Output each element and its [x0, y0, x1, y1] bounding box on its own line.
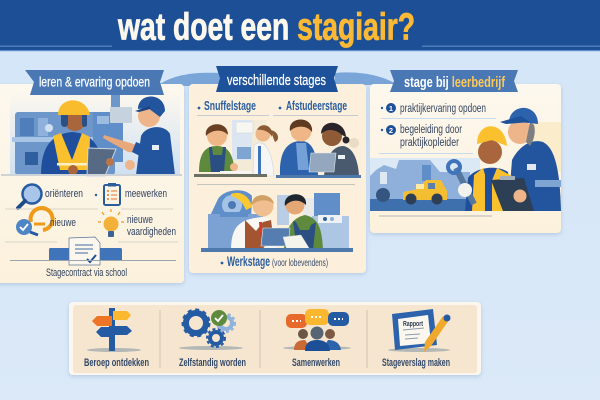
heading: snuffelstage: Snuffelstage [204, 98, 256, 113]
panel: bottom benefits strip [69, 302, 481, 375]
item: samenwerken: Samenwerken [292, 357, 340, 369]
scene: two workers at a machine [1, 92, 182, 176]
clipboard [491, 176, 534, 211]
apprentice with helmet and wrench [448, 126, 514, 211]
item: zelfstandig worden [179, 310, 246, 369]
item: samenwerken [283, 309, 351, 369]
item: beroep ontdekken [84, 308, 149, 369]
ribbon: stage bij leerbedrijf: stage bij leerbedrijf [404, 75, 505, 91]
item: begeleiding door praktijkopleider [381, 124, 462, 149]
item: praktijkervaring opdoen: 1 [389, 104, 393, 113]
title: wat doet een stagiair? [117, 6, 415, 48]
icon: stagecontract document [49, 237, 122, 265]
item: praktijkervaring opdoen: praktijkervaring opdoen [400, 103, 486, 115]
item: begeleiding door praktijkopleider: 2 [389, 126, 393, 135]
heading: afstudeerstage [279, 98, 347, 113]
panel: leren en ervaring opdoen [0, 84, 184, 283]
label: werkstage: (voor lobevendens) [272, 258, 328, 269]
item: stageverslag maken: Rapport [403, 321, 423, 328]
item: praktijkervaring opdoen [381, 103, 486, 115]
item: meewerken: meewerken [125, 188, 167, 200]
item: orienteren [18, 184, 83, 208]
item: nieuwe: nieuwe [50, 217, 76, 229]
panel: verschillende stages [189, 84, 366, 273]
item: begeleiding door praktijkopleider: begeleiding door [400, 124, 462, 136]
worker with blue cap pointing [103, 96, 175, 175]
label: stagecontract via school: Stagecontract via school [46, 267, 127, 279]
label: werkstage [221, 253, 328, 269]
scene: snuffelstage [194, 120, 278, 177]
item: nieuwe vaardigheden [98, 209, 176, 238]
item: nieuwe vaardigheden: vaardigheden [127, 226, 176, 238]
car [403, 180, 447, 204]
ribbon: leren en ervaring opdoen: leren & ervaring opdoen [39, 74, 150, 90]
panel: stage bij leerbedrijf [370, 84, 561, 233]
item: orienteren: oriënteren [45, 188, 83, 200]
item: begeleiding door praktijkopleider: praktijkopleider [400, 137, 459, 149]
item: stageverslag maken [382, 309, 450, 369]
scene: afstudeerstage [276, 120, 361, 178]
heading: snuffelstage [198, 98, 256, 113]
worker with helmet and vest [41, 100, 116, 176]
ribbon: verschillende stages [216, 66, 338, 92]
ribbon: stage bij leerbedrijf [390, 70, 518, 92]
label: werkstage: Werkstage [227, 253, 270, 269]
item: stageverslag maken: Stageverslag maken [382, 357, 450, 369]
item: beroep ontdekken: Beroep ontdekken [84, 357, 149, 369]
scene: workshop with car and two workers [370, 108, 561, 211]
item: zelfstandig worden: Zelfstandig worden [179, 357, 246, 369]
item: nieuwe vaardigheden: nieuwe [127, 214, 153, 226]
item: nieuwe [16, 208, 76, 235]
ribbon: verschillende stages: verschillende stages [227, 72, 326, 89]
scene: werkstage [201, 190, 353, 252]
connector arcs between panels [160, 72, 396, 86]
heading: afstudeerstage: Afstudeerstage [286, 98, 347, 113]
ribbon: leren en ervaring opdoen [25, 70, 164, 95]
item: meewerken [95, 183, 167, 205]
supervisor with blue cap [500, 108, 561, 211]
header banner [0, 0, 600, 51]
